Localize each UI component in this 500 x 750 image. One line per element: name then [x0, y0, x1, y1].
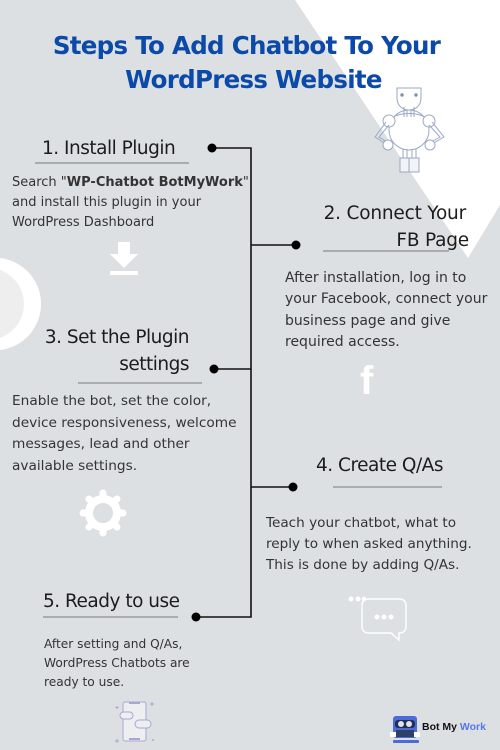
- step 3 heading: 3. Set the Plugin: [45, 327, 189, 348]
- step 3 heading: settings: [119, 354, 189, 374]
- step 3 text: available settings.: [12, 458, 137, 474]
- title: [53, 31, 441, 94]
- step 4 text: This is done by adding Q/As.: [266, 557, 459, 573]
- step 5 text: ready to use.: [44, 674, 124, 688]
- step 3 text: Enable the bot, set the color,: [12, 393, 211, 409]
- step 4 text: [266, 515, 472, 573]
- step 3 text: device responsiveness, welcome: [12, 415, 237, 431]
- step 4 heading: 4. Create Q/As: [316, 455, 443, 476]
- step 2 text: After installation, log in to: [285, 270, 466, 286]
- step 3 text: messages, lead and other: [12, 436, 190, 452]
- step 2 text: business page and give: [285, 313, 450, 329]
- step 1 text: Search "WP-Chatbot BotMyWork": [12, 175, 249, 190]
- step 1 text: WordPress Dashboard: [12, 215, 154, 230]
- step 4 text: reply to when asked anything.: [266, 536, 472, 552]
- title: WordPress Website: [125, 65, 382, 94]
- title: Steps To Add Chatbot To Your: [53, 31, 440, 60]
- step 5 heading: 5. Ready to use: [43, 591, 180, 612]
- logo: Bot My Work: [390, 716, 486, 743]
- step 5 text: After setting and Q/As,: [44, 636, 182, 650]
- step 1 text: and install this plugin in your: [12, 195, 201, 210]
- step 5 text: [44, 636, 190, 688]
- icon: facebook: f: [360, 359, 373, 403]
- step 2 text: your Facebook, connect your: [285, 291, 487, 307]
- step 2 heading: FB Page: [396, 230, 469, 251]
- step 2 text: [285, 270, 488, 350]
- step 2 text: required access.: [285, 334, 400, 350]
- step 3 text: [12, 393, 237, 474]
- step 4 text: Teach your chatbot, what to: [266, 515, 456, 531]
- step 3 heading: [45, 327, 189, 374]
- step 5 text: WordPress Chatbots are: [44, 656, 190, 670]
- step 2 heading: [324, 203, 469, 251]
- step 2 heading: 2. Connect Your: [324, 203, 466, 224]
- step 1 text: [12, 175, 249, 230]
- logo: Bot My Work: Bot My Work: [422, 721, 486, 733]
- step 1 heading: 1. Install Plugin: [42, 138, 175, 159]
